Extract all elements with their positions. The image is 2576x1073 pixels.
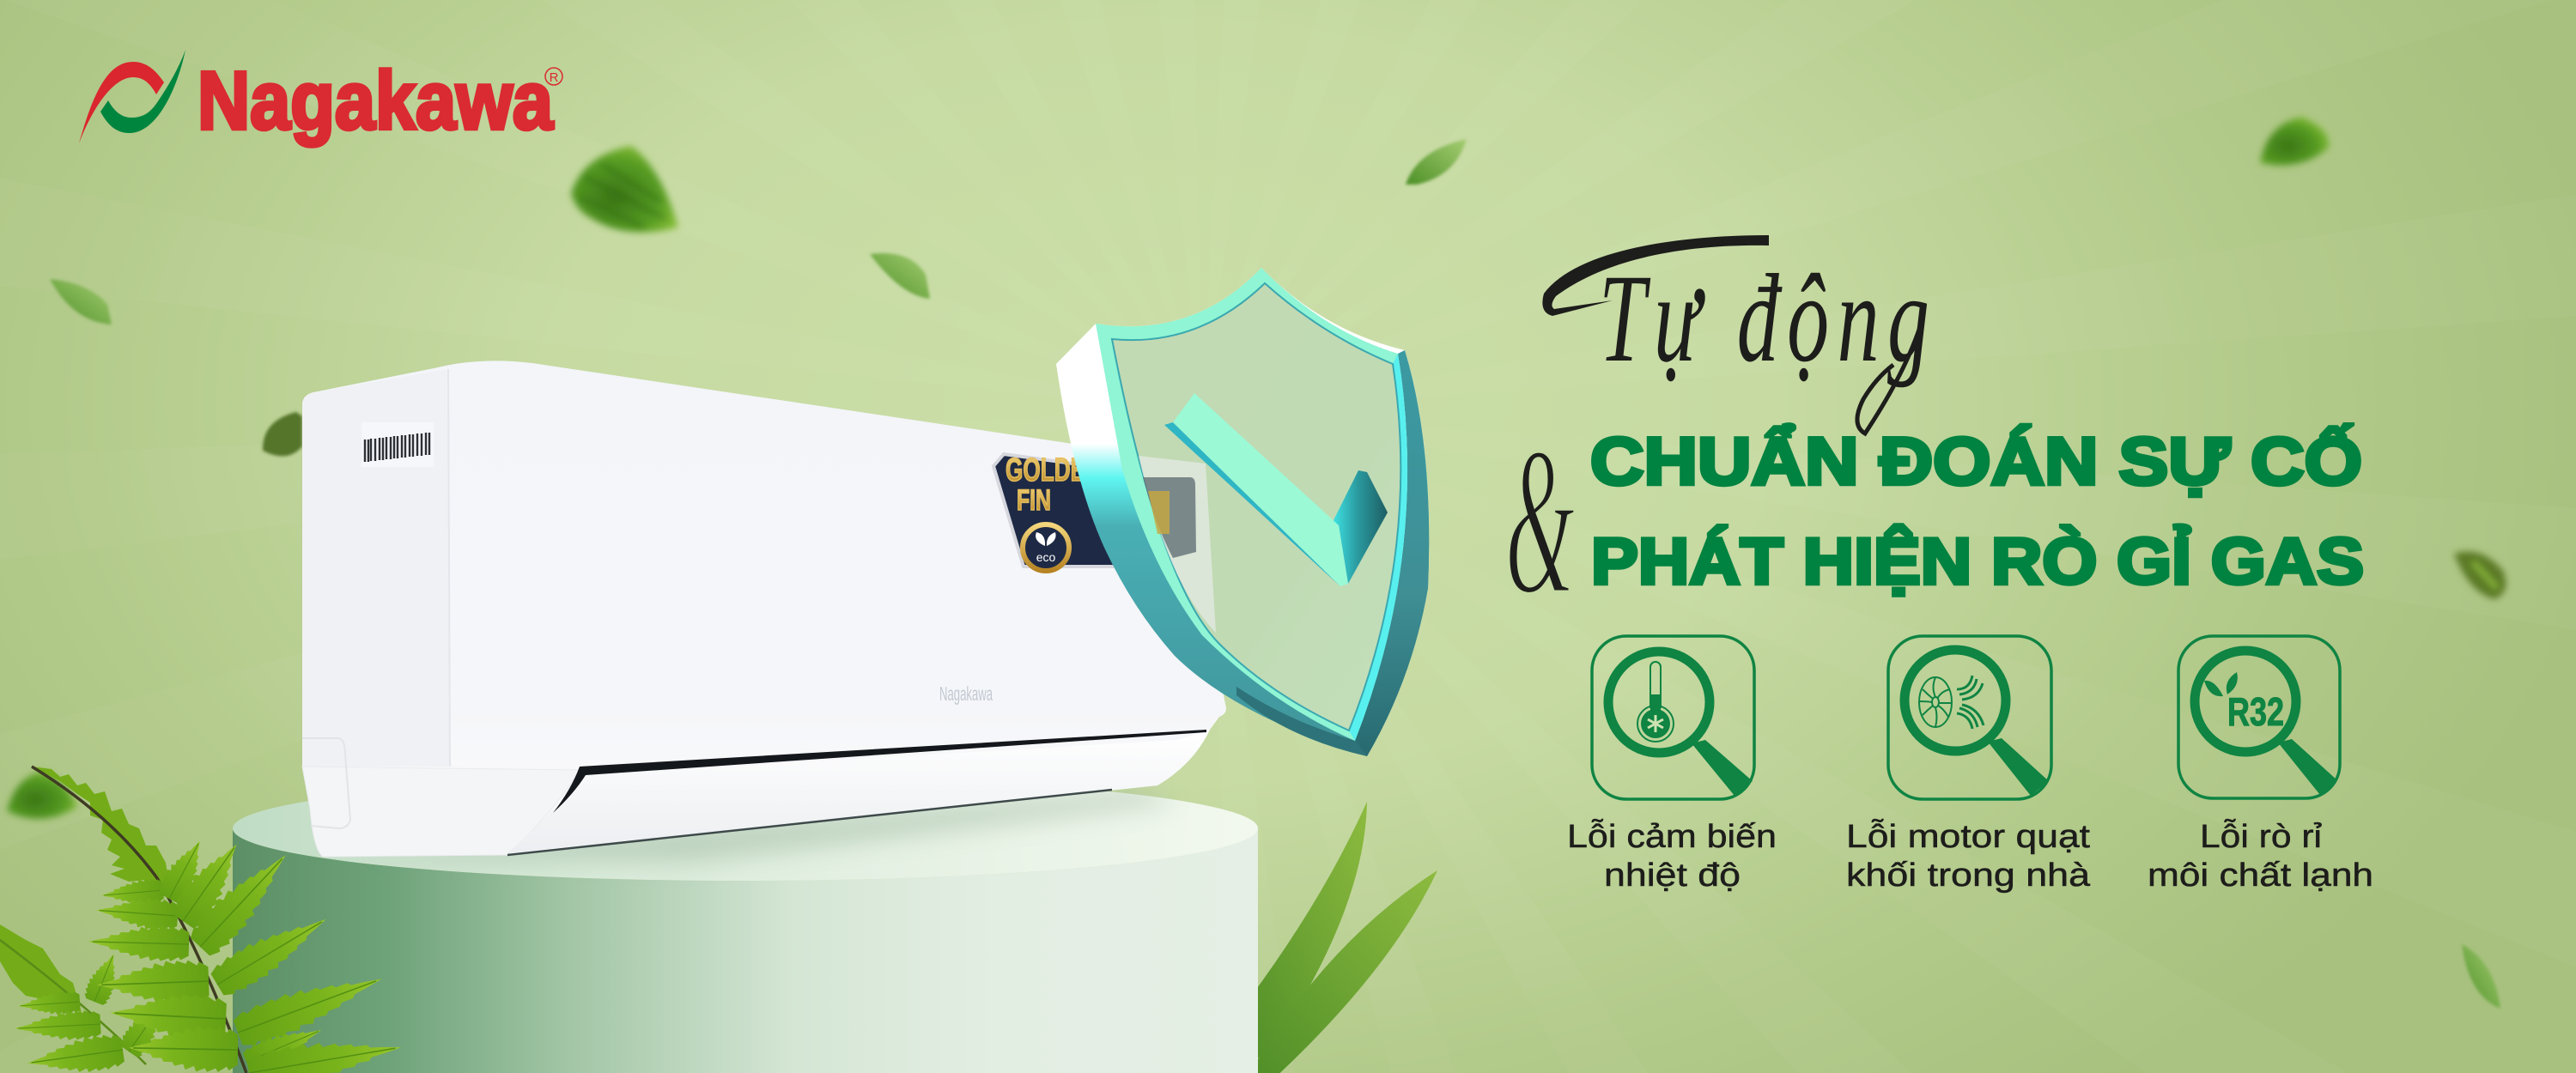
barcode label <box>361 422 434 467</box>
shield fabric face <box>1112 283 1400 730</box>
flying leaf: top right <box>2260 117 2329 166</box>
shield front rim <box>1096 268 1407 741</box>
flying leaf: large top centre <box>571 146 678 233</box>
right pinnae <box>155 834 404 1073</box>
registered mark: R <box>550 70 559 85</box>
front brand name: Nagakawa <box>939 682 993 705</box>
label: refrigerant leak: môi chất lạnh <box>2148 858 2373 894</box>
shadow strip below louver <box>507 790 1112 855</box>
lower dark edge <box>1236 687 1367 756</box>
side panel <box>302 369 450 767</box>
flying leaf: behind unit <box>263 412 302 456</box>
podium body <box>233 828 1258 1073</box>
T flourish <box>1542 235 1769 316</box>
heading: CHUẨN ĐOÁN SỰ CỐ: CHUẨN ĐOÁN SỰ CỐ <box>1590 423 2362 499</box>
check side edge <box>1164 422 1340 586</box>
eco medal: eco <box>1036 550 1055 564</box>
podium <box>233 776 1258 1073</box>
label: refrigerant leak: Lỗi rò rỉ <box>2200 818 2323 855</box>
sticker seen through shield <box>1139 456 1216 633</box>
label: sensor fault: Lỗi cảm biến <box>1567 818 1777 855</box>
fern <box>0 767 404 1073</box>
label: fan motor fault: khối trong nhà <box>1846 858 2091 894</box>
label: sensor fault <box>1567 818 1777 894</box>
check short arm <box>1333 470 1388 584</box>
cyan rim highlight <box>1349 354 1407 741</box>
label: refrigerant leak <box>2148 818 2373 894</box>
heading script text: Tự động <box>1599 250 1929 389</box>
g descender <box>1857 322 1922 433</box>
fan <box>1919 677 1952 727</box>
shield side wall <box>1056 268 1429 756</box>
shadow under unit <box>361 790 1176 863</box>
shield right wall <box>1355 350 1429 756</box>
heading: PHÁT HIỆN RÒ GỈ GAS: PHÁT HIỆN RÒ GỈ GAS <box>1591 524 2364 598</box>
icon: sensor fault <box>1592 636 1754 799</box>
flying leaf: bottom right <box>2462 944 2500 1009</box>
side seam <box>448 369 450 767</box>
flying leaf: right <box>2454 551 2506 599</box>
airflow lines <box>1957 676 1984 729</box>
frond tip lobe <box>32 767 169 893</box>
ampersand: & <box>1505 404 1575 640</box>
podium top <box>233 776 1258 881</box>
logo swoosh: red <box>79 62 164 143</box>
main frond <box>32 767 404 1073</box>
label: sensor fault: nhiệt độ <box>1604 858 1741 894</box>
label: fan motor fault <box>1846 818 2091 894</box>
air outlet slot <box>553 730 1206 813</box>
service hatch <box>302 738 350 828</box>
icon: refrigerant leak <box>2178 636 2340 798</box>
flying leaf: left <box>50 279 112 324</box>
flying leaf: top right of centre <box>1406 139 1467 185</box>
logo swoosh: green <box>100 50 185 133</box>
flying leaf: centre <box>870 253 930 299</box>
golden fin sticker: FIN <box>1017 484 1051 517</box>
heading: Tự động <box>1542 235 1929 433</box>
label: fan motor fault: Lỗi motor quạt <box>1846 818 2091 855</box>
check front <box>1173 393 1348 586</box>
second frond <box>0 924 173 1073</box>
louver flap <box>507 730 1210 853</box>
registered mark <box>545 68 562 85</box>
golden fin sticker: GOLDEN <box>1005 452 1102 488</box>
flying leaf: above fern <box>7 771 77 819</box>
R32: R32 <box>2227 689 2284 734</box>
eco medal <box>1023 524 1069 571</box>
air conditioner indoor unit <box>302 361 1226 857</box>
golden fin sticker <box>993 452 1116 571</box>
tropical leaves behind podium <box>1245 802 1437 1073</box>
leaves <box>2204 672 2238 696</box>
3D shield with check mark <box>1056 268 1429 756</box>
bottom left cover <box>302 767 580 857</box>
left pinnae <box>88 878 238 1072</box>
logo: Nagakawa <box>79 50 562 147</box>
thermometer <box>1637 662 1674 742</box>
icon: fan motor fault <box>1888 636 2051 799</box>
logo wordmark: Nagakawa <box>197 55 554 147</box>
check mark <box>1164 393 1388 586</box>
unit body <box>302 361 1226 857</box>
